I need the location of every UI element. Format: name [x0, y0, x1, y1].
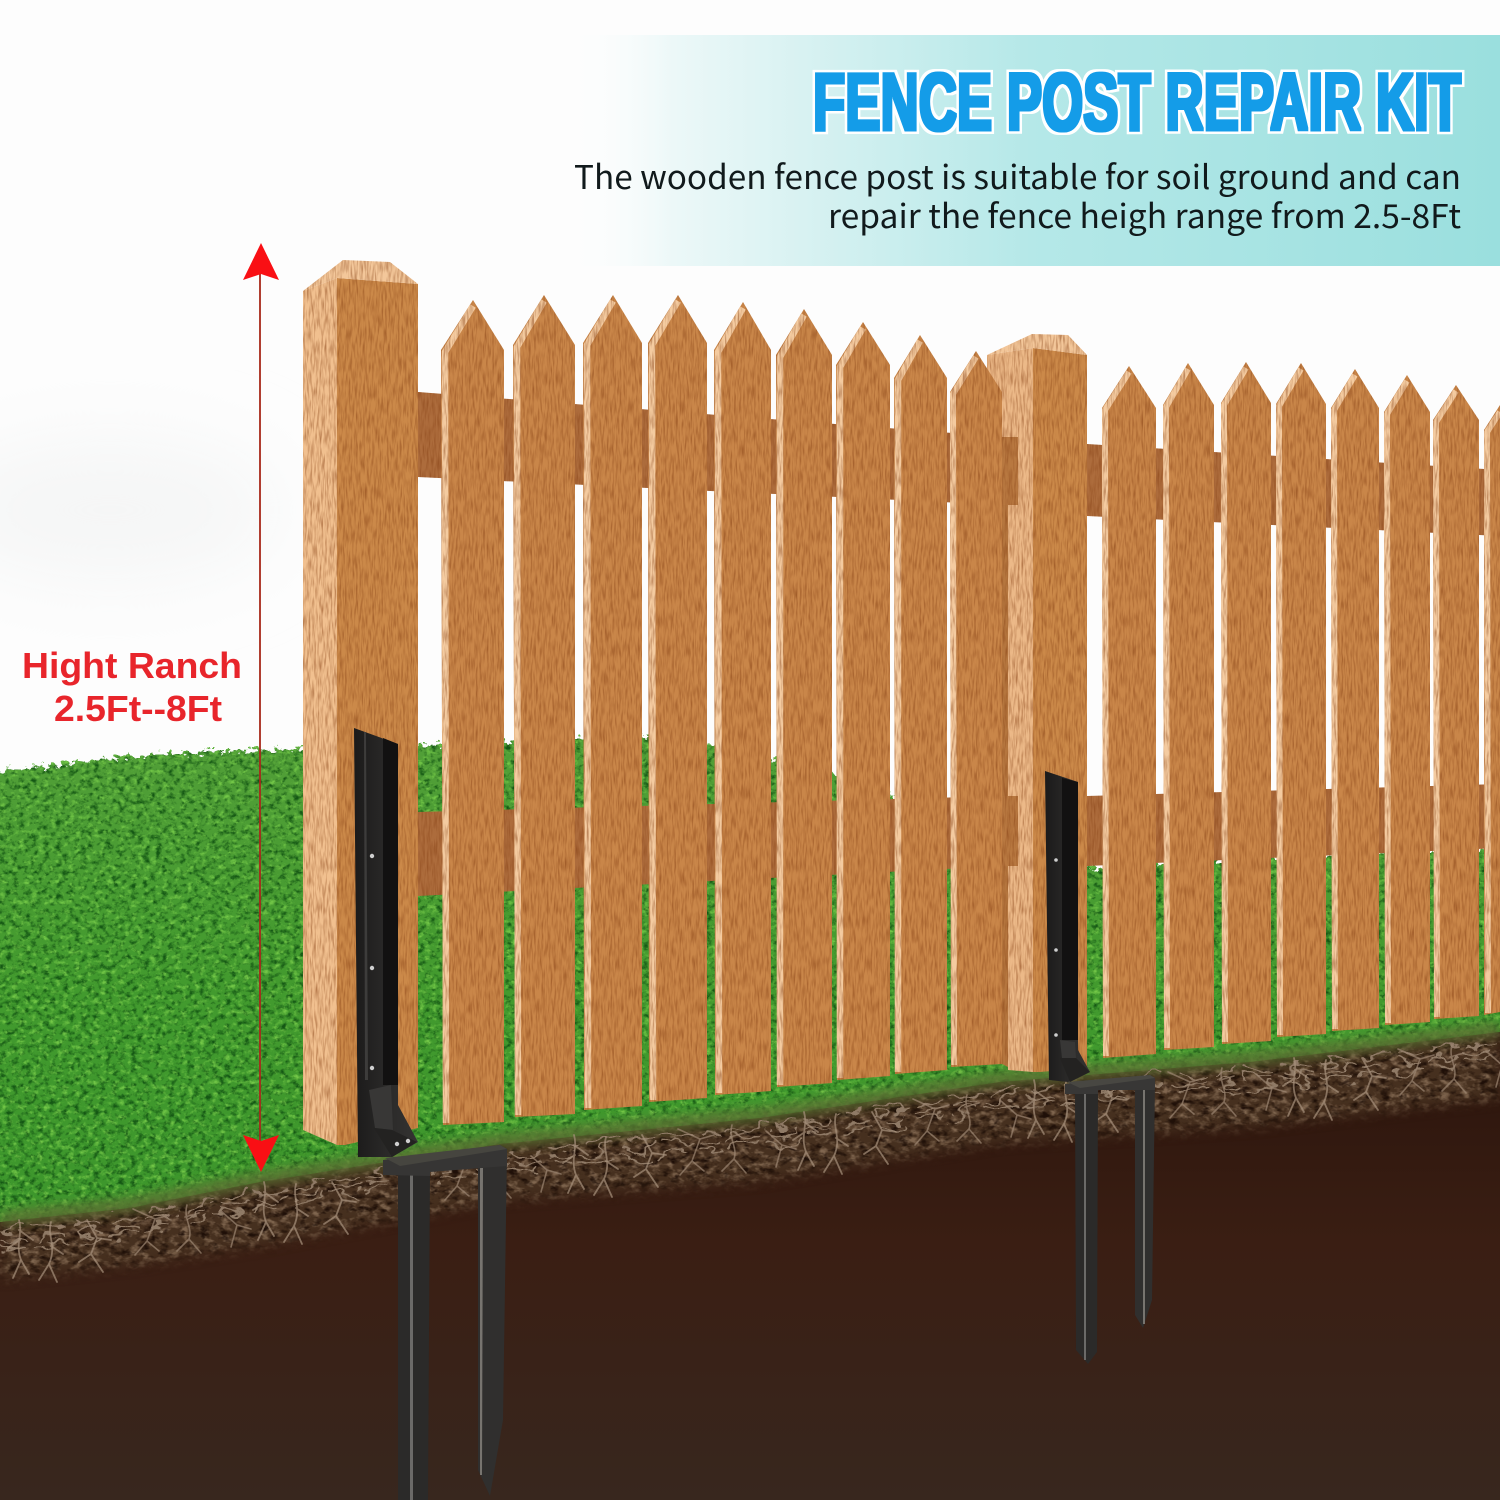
post: left [303, 260, 418, 1145]
upright plate [354, 728, 418, 1157]
subtitle: repair the fence heigh range from 2.5-8Ft [828, 190, 1461, 238]
rails: right section upper and lower [1087, 444, 1500, 866]
right leg [1135, 1082, 1155, 1328]
hanging roots [8, 1045, 1500, 1282]
grass lawn [0, 735, 1500, 1240]
soil cross-section [0, 1028, 1500, 1500]
height range label: 2.5Ft--8Ft [54, 688, 222, 729]
fence [303, 260, 1500, 1145]
height range label: Hight Ranch [22, 645, 242, 686]
bracket: left repair stake [354, 728, 507, 1500]
right leg [478, 1152, 507, 1496]
bracket bolts and holes [370, 854, 410, 1146]
pickets: right section [1102, 362, 1500, 1058]
crossbar [383, 1145, 507, 1176]
crossbar [1065, 1075, 1155, 1094]
header banner [560, 35, 1500, 266]
left leg [398, 1170, 430, 1500]
olive fringe at grass edge [0, 1028, 1500, 1218]
subtitle: The wooden fence post is suitable for soil ground and can [574, 151, 1461, 199]
matted surface fibres [0, 1042, 1500, 1248]
front picket overlapping centre post [950, 351, 1002, 1067]
pickets: left section [441, 295, 947, 1125]
arrowhead top [243, 243, 279, 280]
bracket: centre repair stake [1045, 771, 1155, 1364]
arrowhead bottom [243, 1135, 279, 1172]
bracket holes [1054, 858, 1058, 1037]
post: centre [987, 334, 1087, 1072]
subtitle [574, 151, 1461, 238]
upright plate [1045, 771, 1090, 1082]
left leg [1075, 1092, 1098, 1364]
rails: left section upper and lower [418, 392, 1004, 896]
sky background [0, 0, 1500, 800]
height range label [22, 645, 242, 729]
height arrow [243, 243, 279, 1172]
grass-to-soil root band [0, 1032, 1500, 1278]
rail tenons on centre post [1002, 437, 1018, 505]
